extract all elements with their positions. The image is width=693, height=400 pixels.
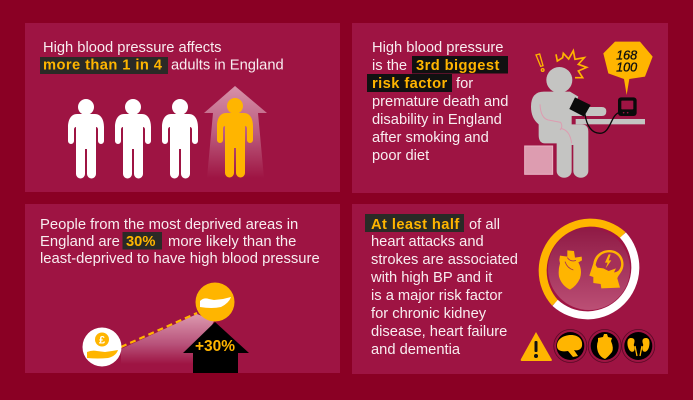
icon: white person 2 xyxy=(115,99,151,178)
text: heart attack and stroke statement: of all xyxy=(469,217,500,233)
icon: heart badge xyxy=(588,330,621,362)
text: risk factor statement: premature death and xyxy=(372,94,508,110)
icon: white person 1 xyxy=(68,99,104,178)
callout: reading 168/100: 100 xyxy=(616,60,637,74)
chart: half gold, half white ring xyxy=(543,223,635,315)
wedge: gradient rise between circles xyxy=(121,314,214,364)
icon: blood pressure cuff xyxy=(569,97,591,117)
icon: heart xyxy=(559,250,582,290)
text: heart attack and stroke statement: and dementia xyxy=(371,342,461,358)
icon: head with brain and lightning xyxy=(589,250,624,288)
text: risk factor statement: for xyxy=(456,76,473,92)
icon: warning triangle xyxy=(521,332,552,361)
text: deprivation statement: more likely than the xyxy=(168,234,296,250)
icon: white circle with hand and pound coin: £ xyxy=(99,334,105,346)
icon: white person 3 xyxy=(162,99,198,178)
panel: more than 1 in 4 adults xyxy=(25,23,340,192)
text: prevalence statement xyxy=(40,40,284,74)
icon: gold person xyxy=(217,98,253,178)
text: risk factor statement: risk factor xyxy=(372,76,448,92)
icon: gold circle with open hand xyxy=(196,282,234,322)
text: heart attack and stroke statement: At least half xyxy=(371,217,460,233)
panel: 3rd biggest risk factor xyxy=(352,23,668,193)
text: deprivation statement xyxy=(40,217,320,267)
text: deprivation statement: least-deprived to have high blood pressure xyxy=(40,251,320,267)
panel: at least half of heart attacks xyxy=(352,204,668,374)
text: prevalence statement: more than 1 in 4 xyxy=(43,58,163,74)
text: prevalence statement: High blood pressure affects xyxy=(43,40,222,56)
text: heart attack and stroke statement: is a major risk factor xyxy=(371,288,503,304)
text: heart attack and stroke statement: disease, heart failure xyxy=(371,324,507,340)
arrow: +30%: +30% xyxy=(195,338,235,355)
illustration: patient having blood pressure measured xyxy=(525,42,653,178)
text: risk factor statement: 3rd biggest xyxy=(416,58,500,74)
text: heart attack and stroke statement: for chronic kidney xyxy=(371,306,487,322)
callout: reading 168/100: 168 xyxy=(616,49,637,63)
icon: white circle with hand and pound coin xyxy=(82,328,122,366)
icon: seated person xyxy=(531,67,606,178)
text: deprivation statement: England are xyxy=(40,234,120,250)
icon: table xyxy=(576,119,645,124)
text: risk factor statement: is the xyxy=(372,58,407,74)
text: risk factor statement xyxy=(367,40,508,164)
icon: monitor xyxy=(618,97,637,116)
callout: reading 168/100 xyxy=(603,42,653,95)
icon: cable xyxy=(585,112,619,133)
text: heart attack and stroke statement: strokes are associated xyxy=(371,252,518,268)
text: heart attack and stroke statement xyxy=(365,214,518,358)
panel: deprived areas 30% xyxy=(25,204,340,373)
text: risk factor statement: after smoking and xyxy=(372,130,489,146)
text: heart attack and stroke statement: with high BP and it xyxy=(370,270,492,286)
text: risk factor statement: disability in England xyxy=(372,112,502,128)
icon: brain badge xyxy=(554,330,587,362)
text: prevalence statement: adults in England xyxy=(171,58,284,74)
arrow: +30% xyxy=(183,322,249,373)
line: dashed rise xyxy=(121,313,197,347)
icon: exclamation mark xyxy=(536,54,544,71)
text: deprivation statement: People from the most deprived areas in xyxy=(40,217,298,233)
text: risk factor statement: poor diet xyxy=(372,148,429,164)
arrow: rising behind gold figure xyxy=(204,86,267,178)
text: risk factor statement: High blood pressure xyxy=(372,40,503,56)
icon: stool xyxy=(525,146,553,174)
icon: pain burst xyxy=(556,51,587,78)
icon: heart and brain in head xyxy=(559,250,624,290)
text: deprivation statement: 30% xyxy=(126,234,155,250)
icon: kidneys badge xyxy=(622,330,655,362)
text: heart attack and stroke statement: heart attacks and xyxy=(371,234,484,250)
